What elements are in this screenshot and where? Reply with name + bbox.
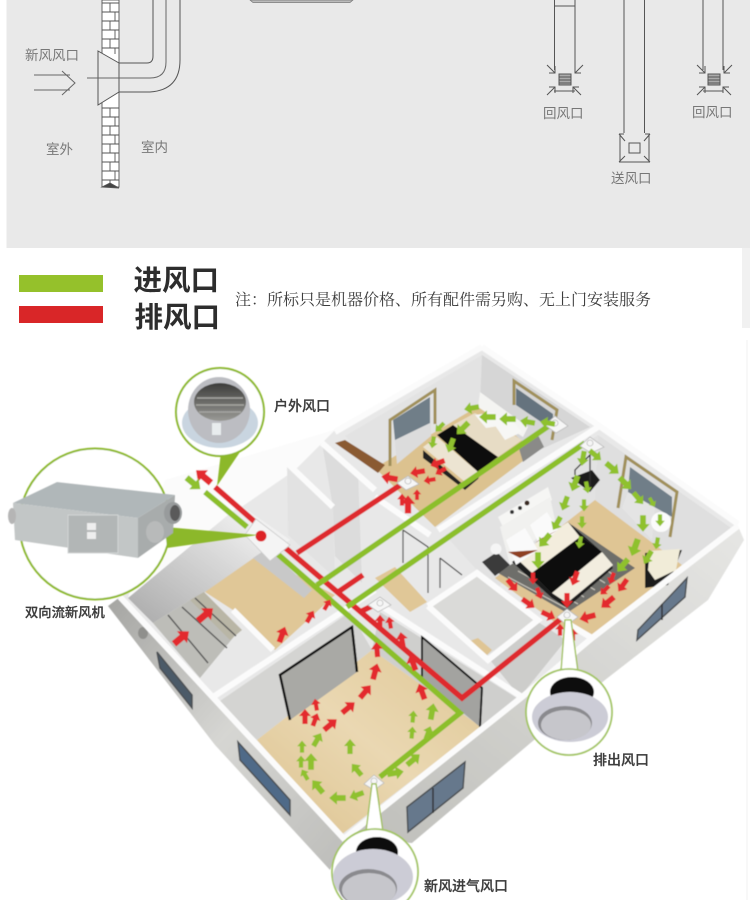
arrow: fresh air inflow [34, 71, 75, 95]
stair room wall [128, 505, 290, 623]
label: return vent left: 回风口 [543, 106, 584, 121]
label: fresh air inlet: 新风风口 [25, 48, 79, 63]
carpet [498, 525, 635, 613]
icon: brick wall [102, 0, 119, 188]
label: bidirectional ventilator: 双向流新风机 [25, 605, 105, 620]
wall duct hole [138, 627, 148, 639]
arrows: fresh airflow [182, 401, 665, 805]
icon: supply vent [619, 0, 650, 162]
window left [393, 397, 431, 464]
legend [19, 265, 220, 334]
top unit stub [250, 0, 353, 2]
exterior wall left [108, 597, 345, 870]
callout: outdoor vent [176, 368, 264, 486]
room floor: hall [205, 555, 335, 650]
red exhaust ducts [215, 482, 562, 698]
window [622, 492, 655, 540]
icon: return vent left [547, 0, 583, 95]
stairs [153, 592, 242, 678]
chart: isometric house floor plan [108, 347, 744, 870]
legend swatch: intake [19, 275, 103, 292]
label: outdoor vent: 户外风口 [274, 398, 330, 414]
exterior wall right [345, 526, 744, 843]
ceiling vents [364, 416, 604, 790]
door left [280, 627, 357, 720]
exterior windows [157, 578, 687, 832]
note text: 注：所标只是机器价格、所有配件需另购、无上门安装服务 [235, 287, 651, 310]
label: indoor: 室内 [141, 139, 168, 155]
legend label: intake: 进风口 [134, 265, 219, 297]
partition walls [287, 443, 462, 612]
outdoor ducts [205, 423, 585, 777]
callout: exhaust vent [526, 620, 612, 755]
label: outdoor: 室外 [46, 141, 73, 157]
window right [516, 388, 553, 430]
label: return vent right: 回风口 [692, 105, 732, 120]
icon: fresh air duct [87, 0, 180, 105]
legend swatch: exhaust [19, 306, 103, 323]
room: right bedroom [445, 435, 734, 636]
closet [428, 575, 566, 697]
interior base [120, 347, 738, 838]
lamp globe [651, 512, 671, 532]
sofa [645, 550, 682, 588]
bed [478, 392, 528, 437]
headboard [498, 487, 552, 527]
icon: unit outlet on wall [245, 519, 290, 561]
legend label: exhaust: 排风口 [134, 302, 220, 334]
label: exhaust vent: 排出风口 [593, 752, 649, 768]
callout: fresh air vent [332, 784, 418, 900]
dresser [571, 470, 600, 492]
bed [512, 522, 613, 608]
upper-left white wall zone [128, 430, 335, 598]
arrows: exhaust airflow [169, 455, 632, 735]
panel: duct installation diagram [6, 0, 750, 328]
room: top bedroom [335, 355, 590, 527]
wall rims [120, 347, 738, 840]
green intake ducts [205, 423, 585, 777]
label: fresh air vent: 新风进气风口 [424, 878, 508, 894]
icon: return vent right [697, 0, 732, 95]
room: large bottom room [217, 612, 520, 835]
nightstand and lamp [482, 552, 510, 576]
unit shelf [253, 548, 312, 598]
door right [422, 637, 482, 727]
label: supply vent: 送风口 [611, 171, 652, 186]
callout: bidirectional ventilator [8, 448, 258, 600]
